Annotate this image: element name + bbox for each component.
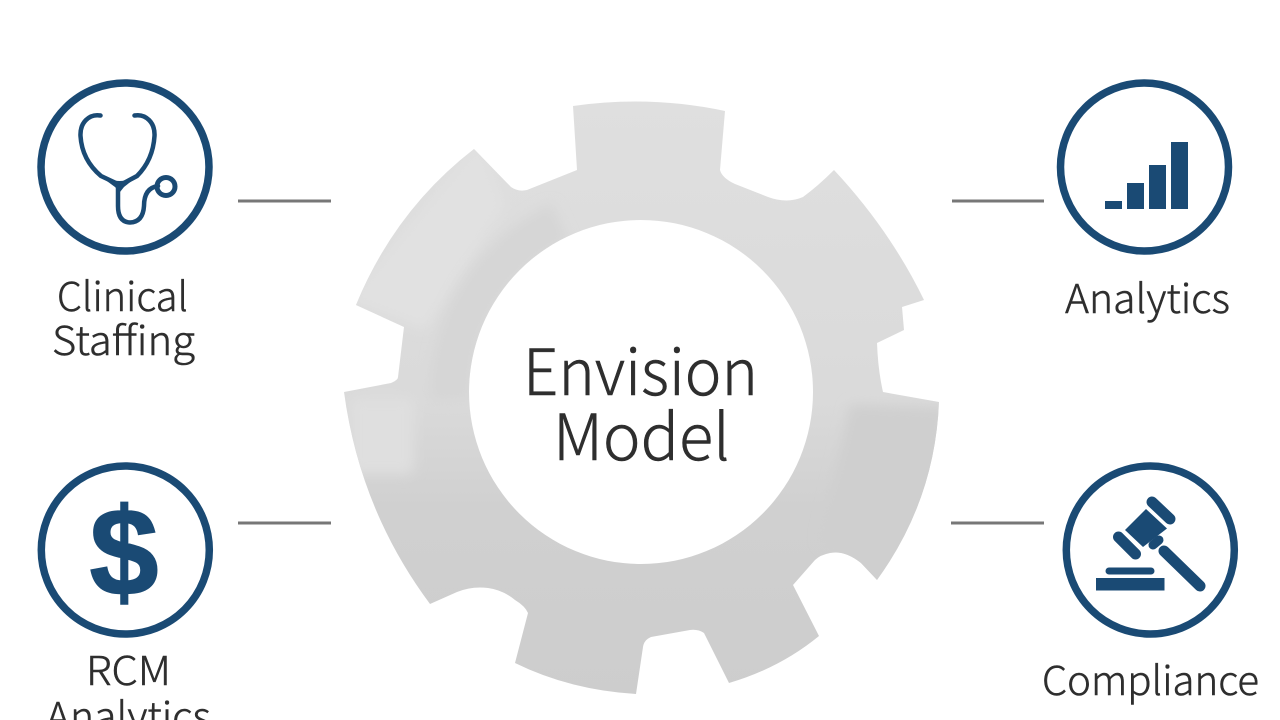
label: Clinical Staffing: Clinical	[57, 265, 188, 323]
label: RCM Analytics	[46, 639, 211, 720]
connector: compliance	[951, 522, 1044, 524]
icon: dollar sign	[41, 466, 209, 634]
icon: stethoscope	[41, 83, 209, 251]
label: Clinical Staffing: Staffing	[52, 309, 195, 367]
connector: analytics	[952, 200, 1044, 202]
icon: gavel	[1066, 466, 1234, 634]
icon: dollar sign: $	[90, 484, 158, 622]
gear graphic	[344, 102, 945, 694]
label: Compliance: Compliance	[1042, 649, 1259, 707]
connector: clinical staffing	[238, 200, 331, 202]
connector: RCM analytics	[238, 522, 331, 524]
label: Analytics: Analytics	[1065, 267, 1230, 325]
label: Clinical Staffing	[52, 265, 195, 367]
gear title: Envision Model: Model	[553, 387, 730, 479]
gear title: Envision Model	[523, 322, 758, 479]
label: RCM Analytics: RCM	[86, 639, 171, 697]
icon: bar chart	[1060, 83, 1228, 251]
gear title: Envision Model: Envision	[523, 322, 758, 414]
